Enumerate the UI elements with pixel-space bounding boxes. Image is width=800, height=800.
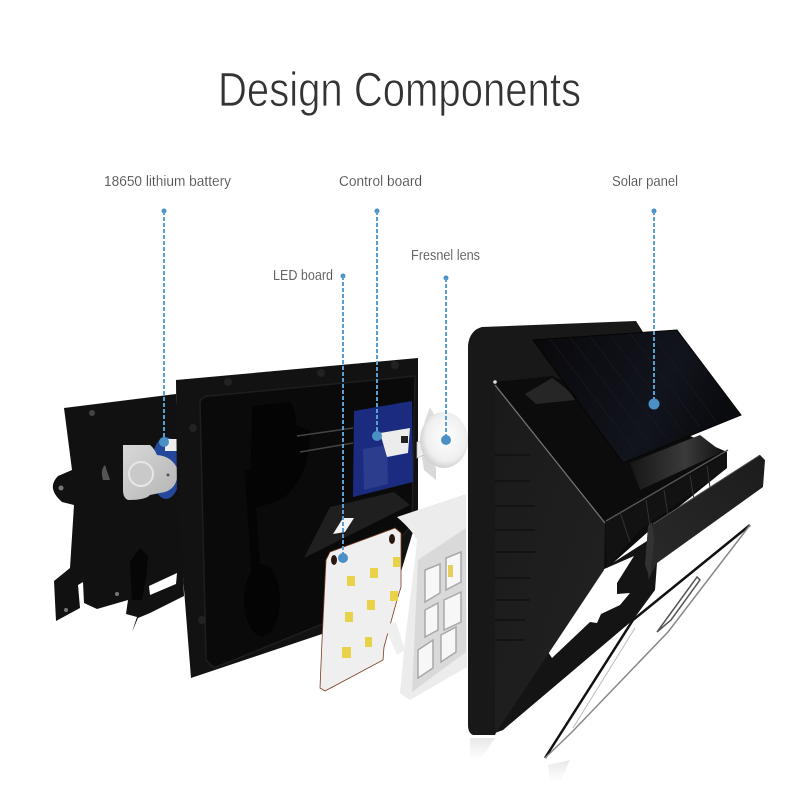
label: LED board: LED board xyxy=(273,267,333,284)
ribbed ledge xyxy=(605,453,727,568)
label: Fresnel lens: Fresnel lens xyxy=(411,247,480,264)
label: 18650 lithium battery: 18650 lithium battery xyxy=(104,173,231,190)
Fresnel lens xyxy=(417,407,468,480)
main rear frame xyxy=(176,358,418,678)
back mounting plate xyxy=(53,394,184,632)
white reflector grid xyxy=(384,494,467,700)
label: Solar panel: Solar panel xyxy=(612,173,678,190)
leader: LED board xyxy=(338,274,348,563)
floor reflections xyxy=(470,738,570,782)
side wedge xyxy=(495,383,605,734)
leader: control board xyxy=(372,208,382,441)
label: Control board: Control board xyxy=(339,173,422,190)
flip cover xyxy=(645,455,765,580)
title: Design Components xyxy=(218,64,581,117)
leader: Fresnel lens xyxy=(441,276,451,445)
leader: battery xyxy=(159,208,169,447)
leader: solar panel xyxy=(648,208,660,410)
inner ledge highlight xyxy=(630,435,722,490)
bottom opening window xyxy=(495,541,657,733)
front housing xyxy=(468,321,765,758)
18650 lithium battery xyxy=(123,437,181,500)
LED board xyxy=(320,528,401,691)
solar panel xyxy=(533,330,741,463)
control board xyxy=(353,401,413,497)
exploded product illustration xyxy=(53,321,765,782)
glass lens frame xyxy=(545,525,750,758)
